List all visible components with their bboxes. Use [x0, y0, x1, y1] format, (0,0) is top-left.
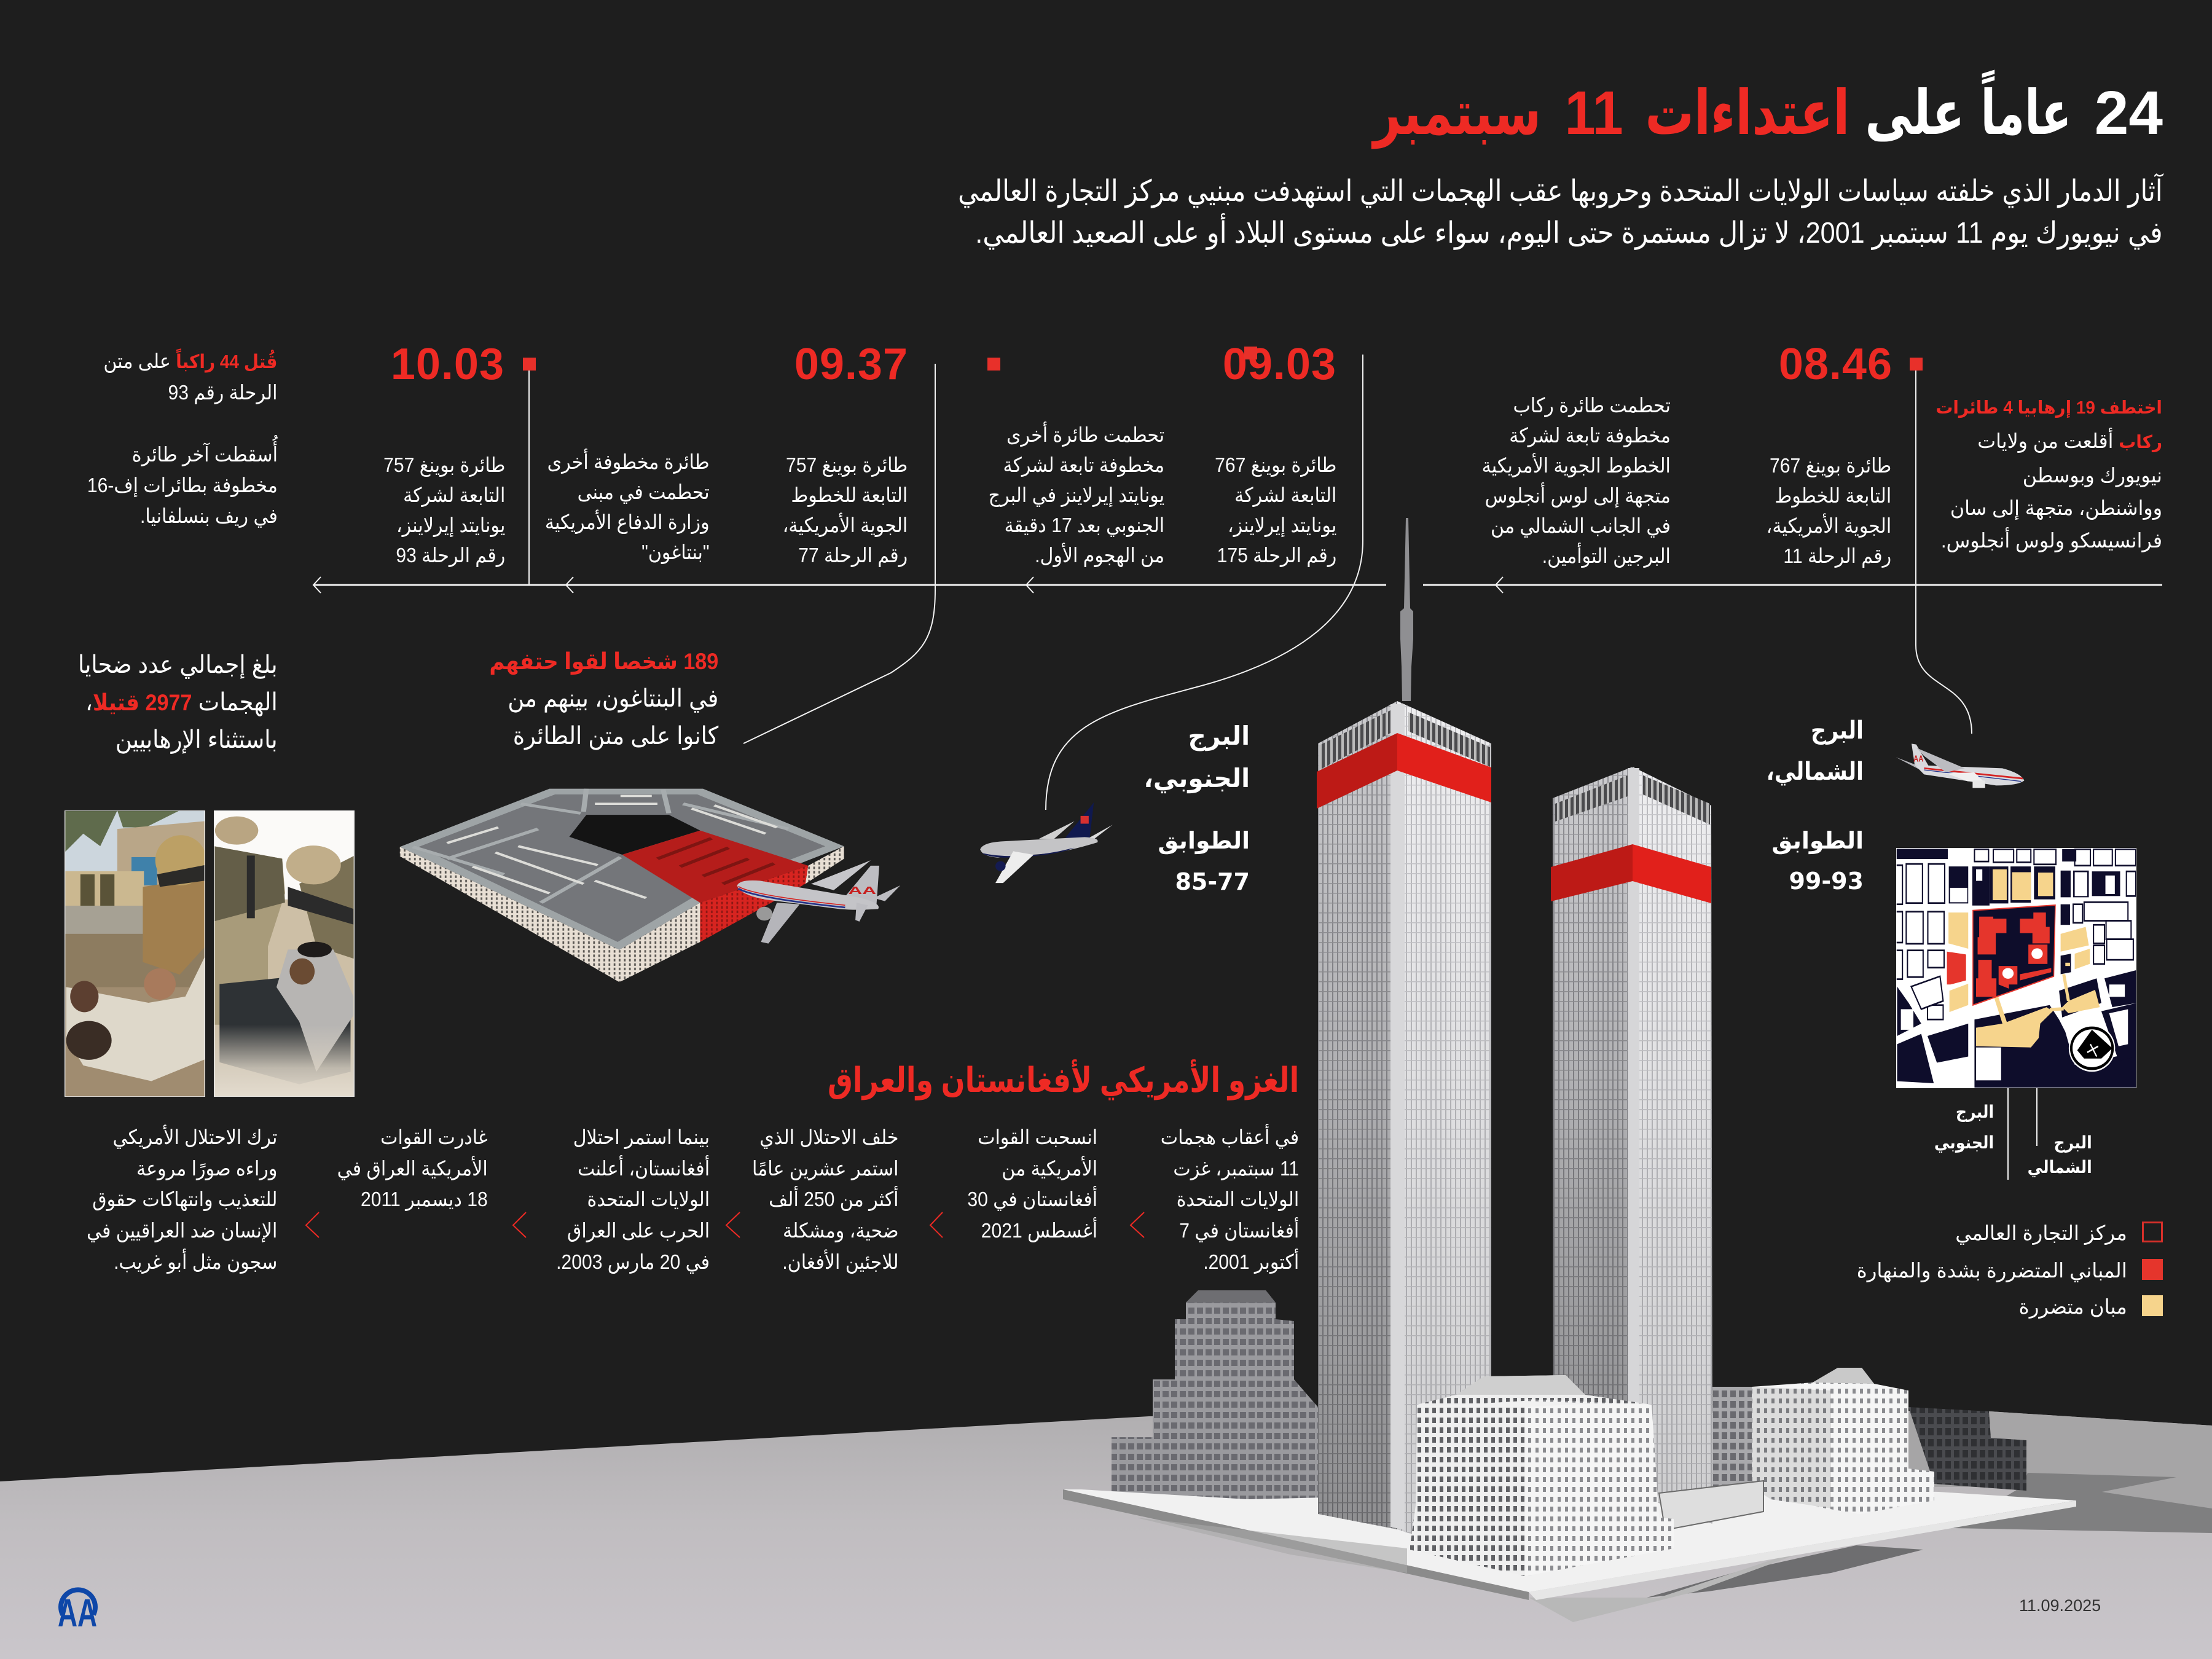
label: map north tower: الشمالي [2028, 1157, 2092, 1177]
title [1371, 70, 2163, 149]
invasion text 2: أفغانستان في 30 [967, 1188, 1097, 1210]
label: south tower [1143, 721, 1250, 794]
title: اعتداءات [1645, 79, 1849, 147]
text: flight 11: رقم الرحلة 11 [1783, 544, 1891, 567]
plane: United Airlines south tower [980, 802, 1113, 884]
text: north tower crash: مخطوفة تابعة لشركة [1509, 424, 1671, 447]
label: map north tower: البرج [2054, 1132, 2092, 1153]
text: flight 11: الجوية الأمريكية، [1766, 514, 1891, 537]
text: north tower crash: تحطمت طائرة ركاب [1513, 394, 1671, 417]
invasion text 6: الإنسان ضد العراقيين في [87, 1219, 277, 1242]
time 10.03: 10.03 [391, 340, 504, 389]
heading: US invasion of Afghanistan and Iraq: الغزو الأمريكي لأفغانستان والعراق [828, 1061, 1299, 1099]
invasion text 2: الأمريكية من [1002, 1157, 1097, 1180]
plane [737, 860, 900, 944]
chevrons on axis [313, 577, 1503, 593]
label: map north tower [2028, 1132, 2092, 1177]
title: سبتمبر [1373, 79, 1541, 147]
north tower [1551, 767, 1712, 1524]
invasion text 6: للتعذيب وانتهاكات حقوق [92, 1188, 277, 1210]
text: flight 93: طائرة بوينغ 757 [383, 453, 505, 476]
connector 09.03 to south plane [1046, 355, 1363, 810]
text: total victims: باستثناء الإرهابيين [116, 726, 278, 753]
south tower [1317, 518, 1491, 1561]
north tower impact floors [1551, 844, 1711, 903]
damaged section [622, 831, 808, 942]
text: north tower crash: البرجين التوأمين. [1542, 544, 1671, 567]
text: hijacking summary [1936, 398, 2162, 552]
label: south tower: البرج [1188, 721, 1250, 751]
subtitle: آثار الدمار الذي خلفته سياسات الولايات المتحدة وحروبها عقب الهجمات التي استهدفت مبنيي مركز التجارة العالمي [958, 175, 2163, 208]
invasion text 1 [1161, 1124, 1299, 1274]
invasion text 3: للاجئين الأفغان. [783, 1250, 899, 1273]
invasion text 1: أفغانستان في 7 [1179, 1219, 1299, 1242]
invasion text 6: سجون مثل أبو غريب. [114, 1250, 277, 1273]
invasion text 4: الولايات المتحدة [587, 1188, 710, 1210]
marker 09.37 [987, 358, 1000, 371]
label: north tower [1767, 716, 1864, 786]
WTC site [1973, 905, 2055, 1005]
timeline axis right [1423, 584, 2162, 586]
moderately damaged buildings [1948, 869, 2100, 1048]
text: flight 11: التابعة للخطوط [1775, 484, 1891, 507]
illustration: Pentagon with plane [399, 789, 900, 982]
invasion text 5: الأمريكية العراق في [337, 1157, 488, 1180]
invasion text 2: انسحبت القوات [978, 1126, 1097, 1148]
map leader north tower [2036, 954, 2037, 1146]
text: flight 175: التابعة لشركة [1234, 484, 1336, 506]
invasion text 4: في 20 مارس 2003. [556, 1250, 710, 1273]
text: total victims [78, 651, 278, 754]
connector 09.37 to Pentagon [743, 364, 935, 743]
text: flight 77: رقم الرحلة 77 [798, 544, 908, 567]
time 09.03: 09.03 [1223, 340, 1336, 389]
text: Pentagon crash: طائرة مخطوفة أخرى [547, 450, 710, 473]
text: flight 11 [1766, 454, 1891, 568]
invasion text 4: بينما استمر احتلال [573, 1126, 710, 1148]
text: flight 93 shot down [87, 435, 278, 528]
text: flight 93: رقم الرحلة 93 [396, 544, 505, 567]
text: south tower crash: الجنوبي بعد 17 دقيقة [1004, 514, 1164, 536]
invasion text 2: أغسطس 2021 [981, 1219, 1097, 1242]
plane: American Airlines north tower [1896, 743, 2024, 788]
building: center front low tower [1410, 1375, 1674, 1576]
text: north tower crash: في الجانب الشمالي من [1491, 514, 1671, 537]
text: hijacking summary: ركاب أقلعت من ولايات [1977, 429, 2162, 452]
invasion text 5: 18 ديسمبر 2011 [361, 1188, 488, 1210]
south tower impact floors [1317, 733, 1491, 809]
text: flight 77 [782, 453, 908, 567]
plane: American Airlines north tower: AA [1913, 753, 1924, 764]
invasion text 1: أكتوبر 2001. [1203, 1250, 1299, 1273]
invasion text 2 [967, 1126, 1097, 1242]
timeline axis left [313, 584, 1386, 586]
invasion text 5 [337, 1122, 488, 1215]
text: Pentagon crash: تحطمت في مبنى [578, 480, 710, 503]
invasion text 5: غادرت القوات [380, 1126, 488, 1148]
text: Pentagon victims [489, 648, 719, 750]
text: flight 93: يونايتد إيرلاينز، [396, 514, 505, 536]
text: flight 93 shot down: أُسقطت آخر طائرة [132, 443, 278, 466]
invasion text 4: الحرب على العراق [567, 1219, 710, 1242]
building platform [1063, 1487, 2076, 1622]
text: flight 93 casualties: الرحلة رقم 93 [168, 381, 278, 404]
label: south tower floors: الطوابق [1158, 827, 1250, 854]
invasion text 4 [556, 1122, 710, 1278]
heavily damaged buildings [1947, 912, 2051, 997]
text: flight 93: التابعة لشركة [403, 484, 505, 506]
text: flight 77: التابعة للخطوط [791, 484, 908, 506]
red chevrons between invasion steps [301, 1207, 1149, 1242]
label: south tower floors [1158, 827, 1250, 895]
map leader south tower [2007, 973, 2009, 1180]
invasion text 1: في أعقاب هجمات [1161, 1126, 1299, 1148]
title: على [1865, 79, 1964, 147]
text: flight 77: الجوية الأمريكية، [782, 514, 908, 536]
label: north tower floors: 99-93 [1789, 868, 1864, 895]
time 09.37: 09.37 [794, 340, 908, 389]
text: flight 11: طائرة بوينغ 767 [1770, 454, 1891, 477]
walls [400, 846, 844, 982]
invasion text 3 [752, 1122, 899, 1278]
text: total victims: بلغ إجمالي عدد ضحايا [78, 651, 278, 678]
marker 10.03 [523, 358, 536, 371]
text: hijacking summary: فرانسيسكو ولوس أنجلوس. [1941, 529, 2162, 552]
text: total victims: الهجمات 2977 قتيلا، [85, 689, 278, 716]
text: Pentagon crash: وزارة الدفاع الأمريكية [545, 511, 710, 533]
text: flight 175: رقم الرحلة 175 [1217, 544, 1336, 567]
text: south tower crash: يونايتد إيرلاينز في البرج [988, 484, 1164, 506]
text: Pentagon victims: كانوا على متن الطائرة [513, 723, 718, 750]
invasion text 6 [87, 1122, 277, 1278]
date: 11.09.2025 [2019, 1596, 2101, 1615]
invasion text 1: 11 سبتمبر، غزت [1173, 1157, 1299, 1180]
invasion text 3: أكثر من 250 ألف [769, 1188, 899, 1210]
invasion text 4: أفغانستان، أعلنت [578, 1157, 710, 1180]
time 08.46: 08.46 [1779, 340, 1892, 389]
text: Pentagon crash: "بنتاغون" [642, 541, 710, 563]
label: south tower floors: 85-77 [1175, 868, 1250, 895]
text: south tower crash: من الهجوم الأول. [1035, 544, 1164, 567]
title: 11 [1565, 79, 1623, 147]
invasion text 6: ترك الاحتلال الأمريكي [112, 1126, 277, 1148]
building: dark far right block [1908, 1407, 2026, 1491]
invasion text 1: الولايات المتحدة [1176, 1188, 1299, 1210]
text: hijacking summary: اختطف 19 إرهابيا 4 طائرات [1936, 398, 2162, 418]
roof [400, 789, 844, 950]
text: flight 93 shot down: مخطوفة بطائرات إف-16 [87, 474, 278, 496]
text: flight 93 [383, 453, 505, 567]
invasion text 3: خلف الاحتلال الذي [760, 1126, 899, 1148]
legend row: World Trade Center: مركز التجارة العالمي [1956, 1222, 2127, 1244]
subtitle: في نيويورك يوم 11 سبتمبر 2001، لا تزال مستمرة حتى اليوم، سواء على مستوى البلاد أو على الصعيد العالمي. [976, 217, 2163, 249]
text: Pentagon victims: في البنتاغون، بينهم من [508, 685, 718, 712]
text: flight 93 shot down: في ريف بنسلفانيا. [140, 504, 278, 527]
map: World Trade Center site [1896, 848, 2136, 1088]
label: map south tower: البرج [1956, 1102, 1994, 1122]
text: south tower crash: تحطمت طائرة أخرى [1006, 423, 1164, 446]
building: canopy [1659, 1481, 1763, 1530]
label: north tower floors: الطوابق [1771, 827, 1864, 854]
text: flight 175 [1215, 453, 1336, 567]
invasion text 3: ضحية، ومشكلة [783, 1219, 899, 1242]
text: Pentagon victims: 189 شخصا لقوا حتفهم [489, 648, 718, 674]
photo: soldiers detaining Iraqi man [214, 810, 355, 1097]
north compass [2069, 1026, 2114, 1071]
text: hijacking summary: وواشنطن، متجهة إلى سان [1950, 496, 2162, 519]
marker 09.03 [1244, 347, 1257, 359]
photo: Iraqi detainee and soldier [65, 810, 205, 1097]
label: north tower floors [1771, 827, 1864, 895]
plane: AA [848, 885, 876, 896]
pins [2002, 948, 2043, 979]
connector 10.03 [528, 371, 530, 585]
text: south tower crash: مخطوفة تابعة لشركة [1003, 453, 1164, 476]
text: flight 93 casualties: قُتل 44 راكباً على متن [104, 350, 278, 372]
text: hijacking summary: نيويورك وبوسطن [2023, 464, 2162, 487]
text: north tower crash: الخطوط الجوية الأمريكية [1482, 454, 1671, 477]
text: flight 77: طائرة بوينغ 757 [786, 453, 908, 476]
text: flight 93 casualties [104, 348, 278, 404]
label: map south tower [1934, 1102, 1994, 1153]
building: dark left tower (WFC) [1112, 1290, 1318, 1517]
title: 24 [2095, 79, 2163, 147]
label: south tower: الجنوبي، [1143, 763, 1250, 793]
connector 08.46 to north plane [1916, 371, 1972, 734]
invasion text 6: وراءه صورًا مروعة [136, 1157, 277, 1180]
title: عاماً [1980, 79, 2071, 147]
text: north tower crash [1482, 394, 1671, 568]
marker 08.46 [1910, 358, 1923, 371]
building: right low tower [1712, 1368, 1934, 1514]
label: north tower: البرج [1811, 716, 1864, 745]
text: north tower crash: متجهة إلى لوس أنجلوس [1485, 484, 1671, 507]
ground plane [0, 1411, 2212, 1659]
city blocks [1896, 849, 2136, 1019]
subtitle [958, 173, 2164, 250]
text: flight 175: يونايتد إيرلاينز، [1228, 514, 1336, 536]
legend row: damaged: مبان متضررة [2019, 1295, 2127, 1318]
antenna [1400, 518, 1413, 701]
text: Pentagon crash [545, 449, 710, 564]
label: map south tower: الجنوبي [1934, 1132, 1994, 1153]
invasion text 3: استمر عشرين عامًا [752, 1157, 899, 1180]
navy blocks [1896, 849, 2136, 1088]
legend row: heavily damaged: المباني المتضررة بشدة والمنهارة [1857, 1259, 2127, 1282]
text: south tower crash [988, 422, 1164, 567]
text: flight 175: طائرة بوينغ 767 [1215, 453, 1336, 476]
label: north tower: الشمالي، [1767, 758, 1864, 786]
